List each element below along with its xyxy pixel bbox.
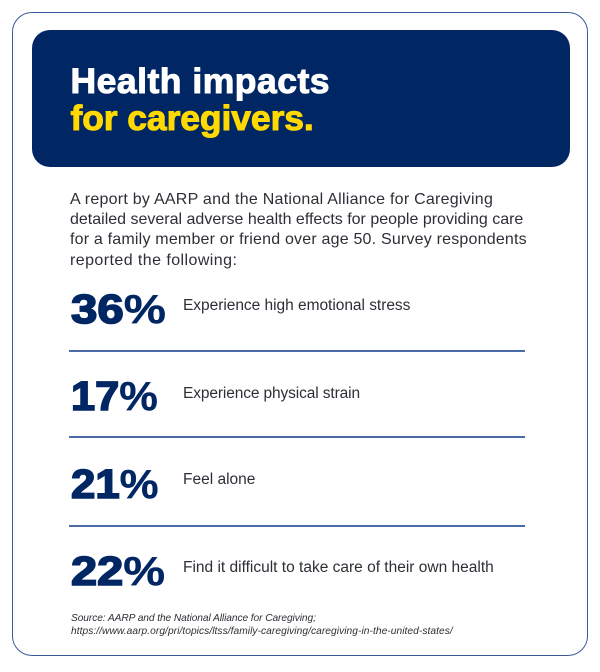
intro text: A report by AARP and the National Alliance for Caregiving bbox=[70, 191, 493, 208]
label: emotional stress: Experience high emotional stress bbox=[183, 297, 410, 314]
source note: Source: AARP and the National Alliance for Caregiving; bbox=[71, 613, 316, 624]
source note bbox=[71, 613, 454, 636]
stat: 21 percent: 21% bbox=[71, 461, 159, 507]
stat: 36 percent: 36% bbox=[71, 286, 166, 332]
title bbox=[70, 61, 330, 138]
intro text: reported the following: bbox=[70, 252, 237, 269]
label: own health: Find it difficult to take care of their own health bbox=[183, 559, 494, 576]
title: Health impacts bbox=[70, 61, 330, 101]
intro text: for a family member or friend over age 50. Survey respondents bbox=[70, 231, 527, 248]
stat: 22 percent: 22% bbox=[71, 548, 165, 594]
title: for caregivers. bbox=[70, 98, 314, 138]
stat: 17 percent: 17% bbox=[71, 373, 158, 419]
label: physical strain: Experience physical strain bbox=[183, 385, 360, 402]
source note: https://www.aarp.org/pri/topics/ltss/family-caregiving/caregiving-in-the-united-states/ bbox=[71, 626, 453, 636]
heading banner bbox=[32, 30, 570, 167]
intro text bbox=[70, 191, 527, 269]
label: feel alone: Feel alone bbox=[183, 471, 255, 488]
intro text: detailed several adverse health effects for people providing care bbox=[70, 211, 523, 228]
